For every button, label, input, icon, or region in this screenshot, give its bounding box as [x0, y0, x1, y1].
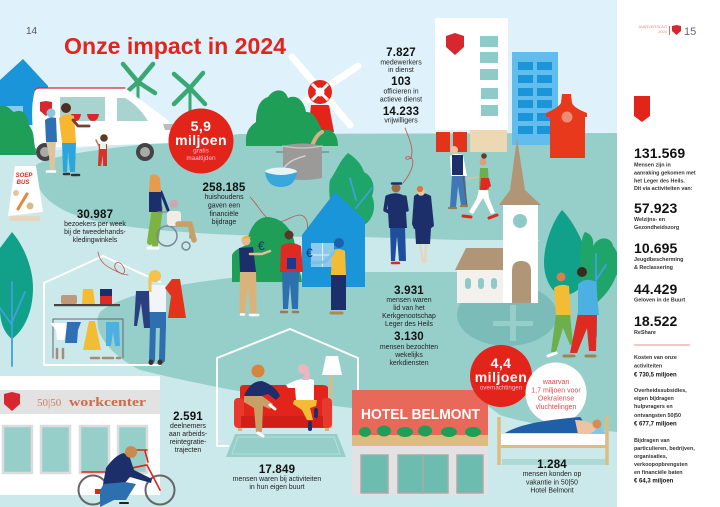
- subsidies block: € 677,7 miljoen: [634, 422, 677, 428]
- text: staff stats: officieren in: [383, 88, 419, 96]
- white office building: [435, 18, 508, 152]
- icon: shield on building: [446, 33, 464, 55]
- clothing: red dress: [165, 279, 186, 318]
- text: staff stats: 14.233: [383, 106, 419, 118]
- text: households stat: huishoudens: [204, 194, 244, 201]
- callout: overnight stays circle: miljoen: [475, 369, 527, 385]
- red gabled house: [546, 94, 587, 158]
- text: shops stat: kledingwinkels: [73, 237, 118, 244]
- callout: overnight stays circle: overnachtingen: [480, 384, 523, 392]
- text: holiday stat: [523, 459, 581, 494]
- person: carer: [148, 174, 168, 248]
- icon: red shield: [634, 96, 650, 122]
- couple house outline: [217, 329, 358, 446]
- text: neighbourhood stat: [233, 464, 321, 491]
- text: staff stats: 103: [391, 76, 411, 88]
- stat: community: 44.429: [634, 281, 678, 297]
- van: [32, 88, 175, 161]
- contributions block: € 64,3 miljoen: [634, 478, 674, 484]
- text: holiday stat: mensen konden op: [523, 471, 581, 478]
- text: reintegration stat: 2.591: [173, 411, 203, 423]
- running header: JAARVERSLAG: [638, 24, 667, 29]
- running header: [638, 24, 696, 38]
- text: neighbourhood stat: 17.849: [259, 464, 295, 476]
- workcenter sign: 50|50: [37, 397, 62, 409]
- running header: 15: [684, 26, 696, 38]
- person: old man with cane: [449, 146, 467, 208]
- blue office building: [512, 52, 558, 145]
- callout: meals circle: [168, 108, 234, 174]
- lower teal ground: [97, 240, 617, 432]
- clothing: trousers: [134, 291, 150, 328]
- text: church stats: lid van het: [393, 305, 425, 312]
- contributions block: verkoopopbrengsten: [634, 462, 688, 468]
- text: staff stats: 7.827: [386, 47, 416, 59]
- text: church stats: 3.130: [394, 331, 424, 343]
- sidebar: [617, 0, 720, 507]
- text: neighbourhood stat: mensen waren bij activiteiten: [233, 476, 321, 483]
- text: holiday stat: vakantie in 50|50: [526, 480, 578, 486]
- person with bicycle: [78, 446, 174, 507]
- soup bowl: [265, 156, 305, 187]
- bed with sleeper: [499, 416, 607, 465]
- stat: total reached: het Leger des Heils.: [634, 178, 685, 184]
- church: [455, 138, 557, 346]
- stat: reshare: [634, 313, 678, 336]
- text: reintegration stat: [169, 411, 207, 454]
- workcenter building: [0, 376, 160, 495]
- stat: youth: Jeugdbescherming: [634, 257, 683, 263]
- icon: workcenter shield: [4, 392, 20, 411]
- stat: total reached: 131.569: [634, 145, 685, 161]
- callout: meals circle: maaltijden: [186, 155, 216, 162]
- running header: 2024: [658, 29, 668, 34]
- text: reintegration stat: reintegratie-: [170, 439, 206, 446]
- costs block: Kosten van onze: [634, 355, 677, 361]
- text: reintegration stat: aan arbeids-: [169, 431, 207, 438]
- green bush behind pot: [246, 90, 338, 146]
- person: walking woman: [463, 153, 497, 218]
- text: church stats: mensen bezochten: [380, 344, 438, 351]
- red sofa: [234, 385, 332, 431]
- shop shelf with bags: [54, 289, 120, 306]
- person: man in blue jumper: [564, 267, 599, 356]
- text: reintegration stat: deelnemers: [170, 423, 207, 430]
- text: church stats: Kerkgenootschap: [382, 313, 436, 320]
- text: neighbourhood stat: in hun eigen buurt: [249, 484, 305, 491]
- stat: total reached: Mensen zijn in: [634, 162, 671, 168]
- stat: community: [634, 281, 685, 304]
- callout: meals circle: gratis: [193, 148, 209, 154]
- title: Onze impact in 2024: [64, 33, 286, 59]
- page number left: 14: [26, 26, 38, 37]
- text: staff stats: medewerkers: [380, 60, 422, 66]
- text: church stats: wekelijks: [394, 352, 423, 359]
- costs block: € 730,5 miljoen: [634, 372, 677, 378]
- text: reintegration stat: trajecten: [175, 447, 201, 454]
- text: shops stat: 30.987: [77, 209, 113, 221]
- subsidies block: Overheidssubsidies,: [634, 388, 687, 394]
- cooking pot: [276, 132, 329, 180]
- stat: youth: [634, 240, 683, 271]
- stat: welfare: Gezondheidszorg: [634, 225, 679, 231]
- person: male officer: [385, 184, 407, 263]
- person: man in red shirt: [280, 230, 303, 312]
- person: man in yellow shirt: [59, 103, 89, 175]
- person: woman with headscarf: [312, 238, 346, 313]
- soup bus sign: [8, 166, 43, 221]
- green tree with blue branches: [329, 153, 374, 228]
- text: households stat: financiële: [209, 211, 239, 218]
- text: staff stats: actieve dienst: [380, 96, 422, 104]
- text: households stat: bijdrage: [212, 219, 236, 226]
- contributions block: [634, 438, 695, 484]
- euro symbols: [258, 239, 313, 260]
- text: church stats: Leger des Heils: [385, 321, 433, 328]
- stat: total reached: aanraking gekomen met: [634, 170, 696, 176]
- connector line: shop: [98, 252, 128, 275]
- floor lamp: [322, 356, 342, 428]
- contributions block: organisaties,: [634, 454, 668, 460]
- stat: reshare: ReShare: [634, 330, 656, 336]
- blue house centre: [302, 192, 365, 287]
- text: holiday stat: Hotel Belmont: [530, 488, 574, 494]
- callout: refugees circle: Oekraïense: [538, 396, 574, 402]
- connector line: staff: [403, 128, 413, 183]
- person: man with helmet: [239, 236, 270, 315]
- person: man in yellow jumper: [548, 272, 573, 356]
- text: staff stats: in dienst: [388, 67, 414, 74]
- green bush centre: [232, 217, 302, 282]
- text: households stat: [203, 182, 246, 226]
- callout: meals circle: 5,9: [191, 118, 211, 134]
- stat: reshare: 18.522: [634, 313, 678, 329]
- contributions block: en financiële baten: [634, 470, 683, 476]
- person: woman on sofa: [286, 364, 317, 429]
- stat: youth: 10.695: [634, 240, 678, 256]
- stat: community: Geloven in de Buurt: [634, 298, 685, 304]
- text: shops stat: bij de tweedehands-: [64, 229, 126, 236]
- windmill: [292, 57, 358, 132]
- green bush left: [0, 106, 36, 155]
- stat: total reached: Dit via activiteiten van:: [634, 186, 693, 192]
- hotel belmont: [352, 390, 488, 495]
- blue house left: [0, 59, 48, 125]
- stat: welfare: [634, 200, 679, 231]
- euro symbols: €: [306, 246, 313, 260]
- thrift shop outline: [44, 256, 160, 365]
- subsidies block: eigen bijdragen: [634, 396, 674, 402]
- soup bus sign: SOEP: [16, 173, 33, 179]
- light ground: [0, 133, 617, 507]
- person: child in red overalls: [96, 134, 108, 166]
- callout: refugees circle: vluchtelingen: [536, 404, 577, 411]
- text: church stats: kerkdiensten: [389, 360, 429, 367]
- callout: overnight stays circle: [470, 345, 532, 407]
- wind turbines: [123, 64, 205, 111]
- stat: welfare: 57.923: [634, 200, 678, 216]
- upper teal ground: [35, 133, 617, 240]
- subsidies block: hulpvragers en: [634, 404, 673, 410]
- teal tree left: [0, 232, 33, 366]
- text: households stat: gaven een: [208, 202, 240, 210]
- text: staff stats: vrijwilligers: [384, 118, 418, 124]
- hotel name: HOTEL BELMONT: [361, 406, 480, 423]
- icon: van shield: [40, 101, 52, 116]
- green bush right: [580, 232, 620, 336]
- subsidies block: [634, 388, 687, 428]
- church cross shadow: [457, 284, 557, 346]
- costs block: activiteiten: [634, 364, 662, 370]
- stat: youth: & Reclassering: [634, 265, 673, 271]
- callout: refugees circle: waarvan: [542, 379, 569, 386]
- callout: refugees circle: 1,7 miljoen voor: [531, 388, 581, 394]
- stat: total reached: [634, 145, 696, 192]
- person: man on sofa: [244, 364, 280, 436]
- rug: [226, 434, 346, 457]
- contributions block: particulieren, bedrijven,: [634, 446, 695, 452]
- text: church stats: 3.931: [394, 285, 424, 297]
- teal tree right: [544, 210, 589, 297]
- person: woman at van: [45, 108, 57, 172]
- text: staff stats: [380, 47, 422, 124]
- subsidies block: ontvangsten 50|50: [634, 413, 681, 419]
- text: shops stat: [64, 209, 126, 244]
- contributions block: Bijdragen van: [634, 438, 670, 444]
- text: shops stat: bezoekers per week: [64, 221, 126, 228]
- callout: refugees circle: [526, 362, 586, 424]
- costs block: [634, 355, 677, 378]
- text: church stats: [380, 285, 438, 367]
- icon: soup bowls: [71, 114, 99, 121]
- connector line: households: [250, 197, 307, 232]
- callout: meals circle: miljoen: [175, 132, 227, 148]
- clothes rack: [50, 319, 123, 358]
- stat: welfare: Welzijns- en: [634, 217, 665, 223]
- workcenter wordmark: workcenter: [69, 394, 146, 409]
- person: wheelchair user: [157, 200, 194, 250]
- euro symbols: €: [258, 239, 265, 253]
- person: female officer: [412, 186, 434, 262]
- soup bus sign: BUS: [17, 180, 29, 186]
- text: households stat: 258.185: [203, 182, 246, 194]
- text: church stats: mensen waren: [386, 297, 432, 304]
- callout: overnight stays circle: 4,4: [491, 355, 511, 371]
- text: holiday stat: 1.284: [537, 459, 567, 471]
- person: woman holding clothes: [134, 270, 186, 362]
